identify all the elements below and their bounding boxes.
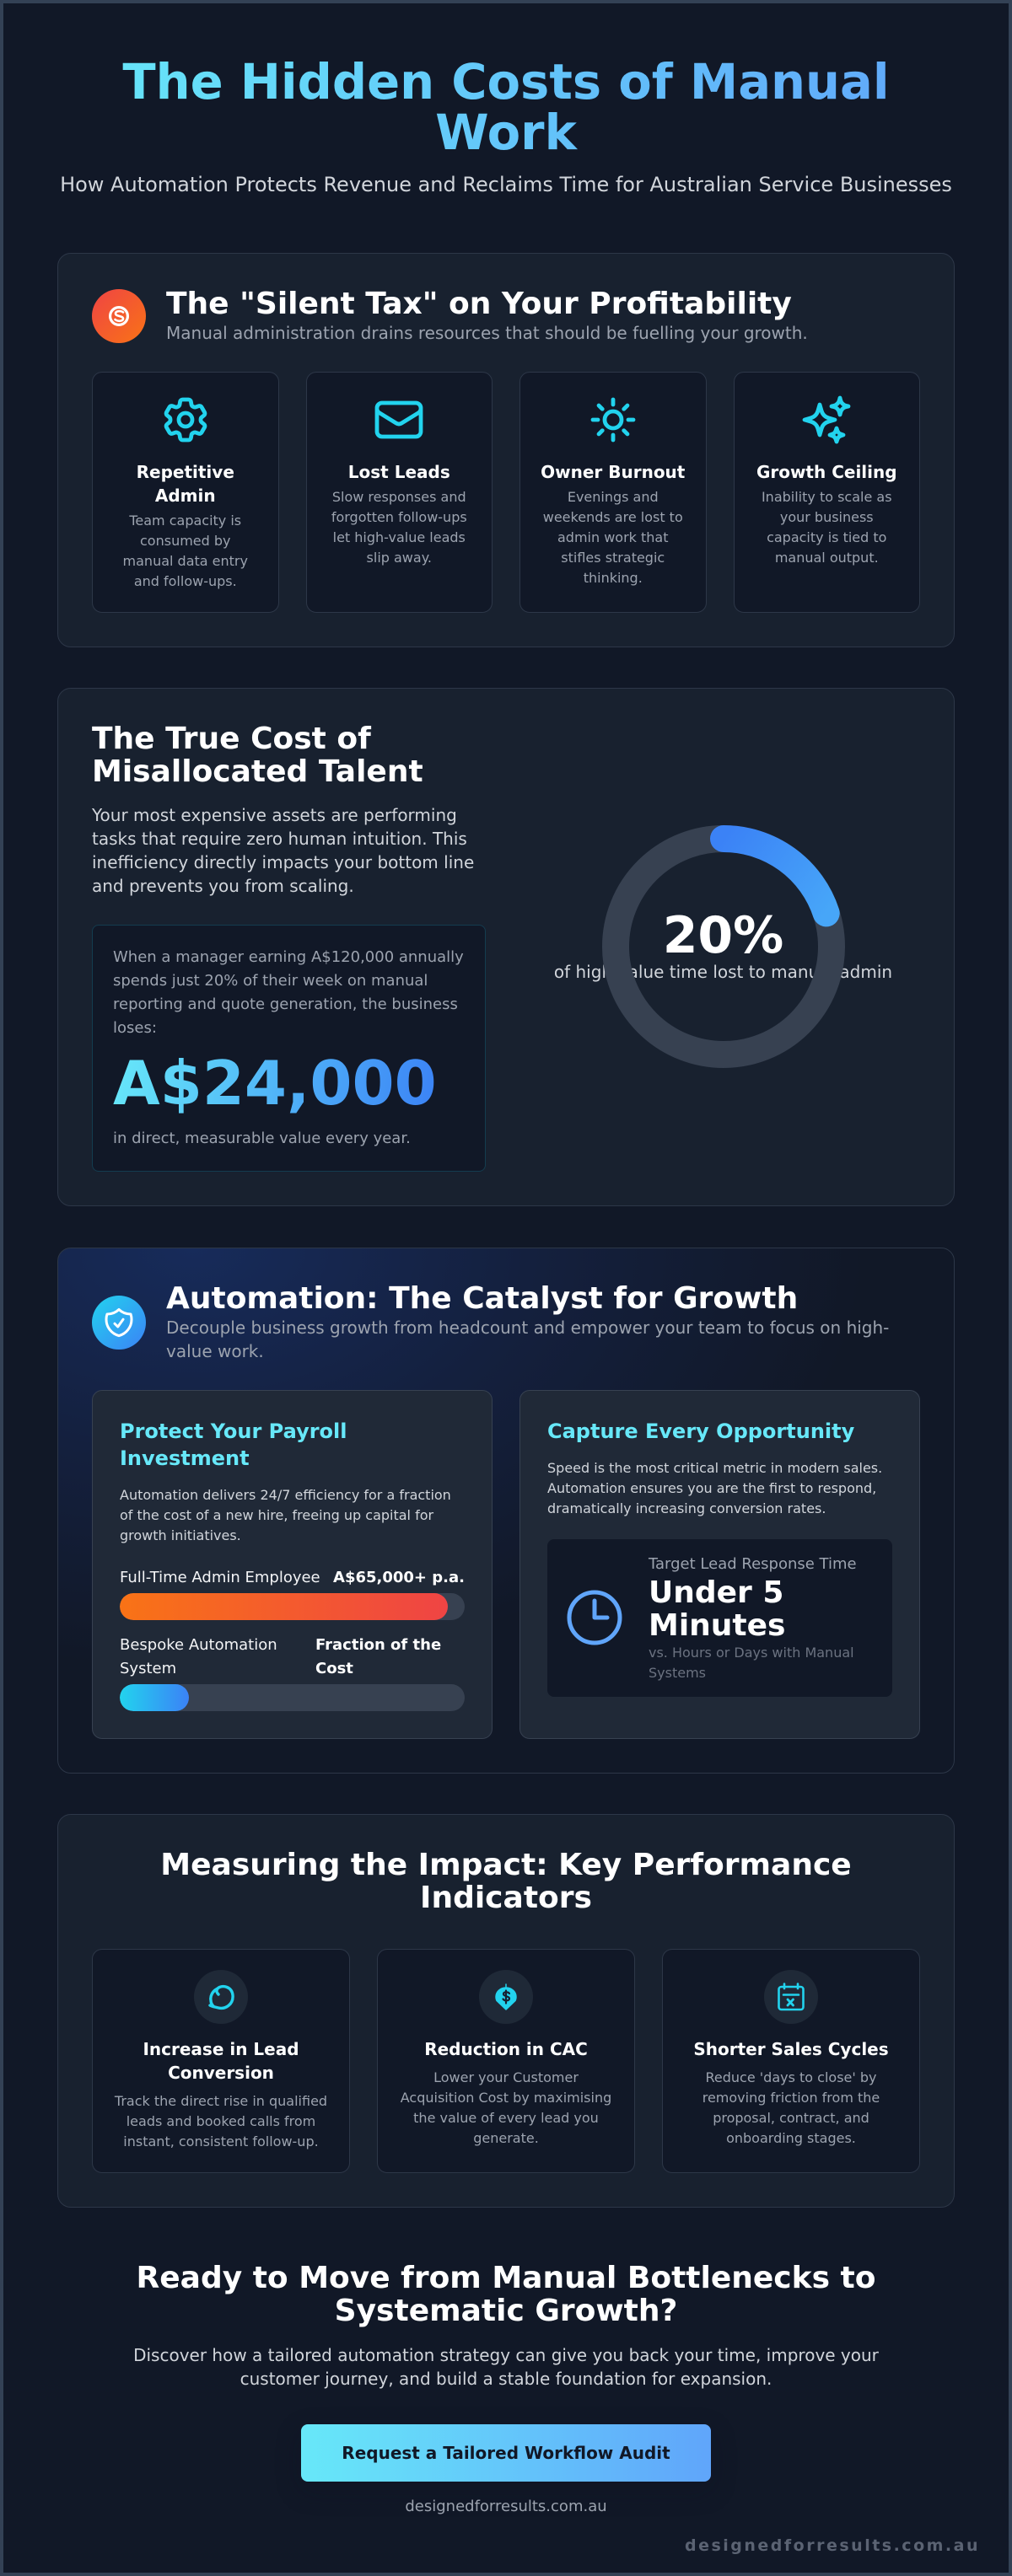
card: repetitive admin — [92, 372, 278, 613]
heading and lead text: The "Silent Tax" on Your Profitability — [166, 287, 792, 321]
card: shorter sales cycles: Reduce 'days to close' by removing friction from the proposal, contract, and onboarding stages. — [702, 2069, 880, 2146]
heading and lead text: Automation: The Catalyst for Growth — [166, 1281, 798, 1316]
two cards — [92, 1390, 920, 1739]
CTA button: Request a Tailored Workflow Audit — [342, 2443, 670, 2463]
bar label: automation: Bespoke Automation System — [120, 1636, 277, 1677]
donut ring — [602, 825, 845, 1068]
card: growth ceiling: Inability to scale as your business capacity is tied to manual output. — [762, 489, 892, 566]
bar label: full-time — [120, 1569, 465, 1586]
KPI cards — [92, 1949, 920, 2173]
card: lost leads — [305, 372, 493, 613]
donut label: of high-value time lost to manual admin — [554, 962, 892, 982]
icon: S coin — [92, 289, 146, 343]
big number: A$24,000 — [113, 1048, 437, 1119]
CTA text: Discover how a tailored automation strategy can give you back your time, improve your customer journey, and build a stable foundation for expansion. — [133, 2345, 879, 2389]
card: owner burnout: Evenings and weekends are lost to admin work that stifles strategic thinking. — [543, 489, 683, 586]
icon: loop arrow — [194, 1970, 248, 2024]
title: The Hidden Costs of Manual Work — [122, 54, 890, 161]
callout footnote: in direct, measurable value every year. — [113, 1130, 411, 1147]
card: growth ceiling — [734, 372, 920, 613]
card: protect payroll — [92, 1390, 493, 1739]
donut label — [554, 906, 892, 982]
bar label: full-time: Full-Time Admin Employee — [120, 1569, 320, 1586]
CTA button — [301, 2424, 711, 2482]
response time box — [547, 1539, 892, 1697]
bar label: automation — [120, 1636, 441, 1677]
callout: A$24,000 — [92, 925, 486, 1172]
card: reduction in CAC: Reduction in CAC — [424, 2039, 588, 2059]
panel: automation catalyst — [57, 1248, 955, 1774]
section header: silent tax — [92, 287, 808, 343]
bar chart: cost comparison — [120, 1569, 465, 1711]
card heading: Capture Every Opportunity — [547, 1419, 854, 1443]
bar label: automation: Fraction of the Cost — [315, 1636, 441, 1677]
CTA heading: Ready to Move from Manual Bottlenecks to Systematic Growth? — [137, 2261, 875, 2328]
card: owner burnout — [519, 372, 707, 613]
card: repetitive admin: Repetitive Admin — [137, 462, 234, 506]
response time text: Under 5 Minutes — [649, 1575, 785, 1643]
card: reduction in CAC — [377, 1949, 635, 2173]
site url: designedforresults.com.au — [405, 2498, 607, 2515]
response time text: Target Lead Response Time — [649, 1555, 857, 1573]
panel: KPIs — [57, 1814, 955, 2208]
bar: full-time — [120, 1593, 465, 1620]
heading: Measuring the Impact: Key Performance Indicators — [160, 1848, 852, 1915]
subtitle: How Automation Protects Revenue and Reclaims Time for Australian Service Businesses — [60, 173, 952, 196]
heading: The True Cost of — [92, 722, 371, 756]
cards row — [92, 372, 920, 613]
card: lead conversion: Increase in Lead Conversion — [143, 2039, 299, 2083]
heading and lead text — [166, 287, 808, 343]
card: owner burnout: Owner Burnout — [541, 462, 685, 482]
bar label: full-time: A$65,000+ p.a. — [333, 1569, 465, 1586]
card: lead conversion — [92, 1949, 350, 2173]
card: lost leads: Slow responses and forgotten follow-ups let high-value leads slip away. — [331, 489, 467, 566]
card: shorter sales cycles — [662, 1949, 920, 2173]
body text: Your most expensive assets are performing tasks that require zero human intuition. This inefficiency directly impacts your bottom line and prevents you from scaling. — [92, 805, 474, 896]
bar: automation — [120, 1684, 465, 1711]
card: reduction in CAC: Lower your Customer Acquisition Cost by maximising the value of every lead you generate. — [401, 2069, 611, 2146]
section header: automation — [92, 1281, 889, 1361]
left column — [92, 722, 486, 1172]
icon: calendar — [764, 1970, 818, 2024]
icon: clock — [567, 1590, 622, 1645]
call to action — [133, 2261, 879, 2515]
card: capture opportunity — [519, 1390, 920, 1739]
panel: true cost — [57, 688, 955, 1206]
donut chart — [554, 825, 892, 1068]
heading and lead text: Manual administration drains resources that should be fuelling your growth. — [166, 323, 808, 343]
icon: dollar tag — [479, 1970, 533, 2024]
card text: Speed is the most critical metric in modern sales. Automation ensures you are the first to respond, dramatically increasing conversion rates. — [547, 1460, 882, 1516]
icon: shield check — [92, 1296, 146, 1350]
card: lead conversion: Track the direct rise in qualified leads and booked calls from instant, consistent follow-up. — [115, 2093, 327, 2149]
donut label: 20% — [663, 906, 783, 965]
card: shorter sales cycles: Shorter Sales Cycles — [693, 2039, 889, 2059]
response time text: vs. Hours or Days with Manual Systems — [649, 1645, 854, 1681]
card heading: Protect Your Payroll Investment — [120, 1419, 347, 1470]
callout text: When a manager earning A$120,000 annually spends just 20% of their week on manual reporting and quote generation, the business loses: — [113, 948, 464, 1037]
card: growth ceiling: Growth Ceiling — [756, 462, 897, 482]
card: lost leads: Lost Leads — [348, 462, 450, 482]
heading and lead text — [166, 1281, 889, 1361]
panel: silent tax — [57, 253, 955, 647]
heading — [92, 722, 423, 789]
heading: Misallocated Talent — [92, 754, 423, 789]
card text: Automation delivers 24/7 efficiency for a fraction of the cost of a new hire, freeing up capital for growth initiatives. — [120, 1487, 451, 1543]
card: repetitive admin: Team capacity is consumed by manual data entry and follow-ups. — [123, 513, 248, 589]
response time text — [648, 1555, 857, 1681]
heading and lead text: Decouple business growth from headcount and empower your team to focus on high-value work. — [166, 1318, 889, 1361]
watermark: designedforresults.com.au — [685, 2536, 980, 2555]
